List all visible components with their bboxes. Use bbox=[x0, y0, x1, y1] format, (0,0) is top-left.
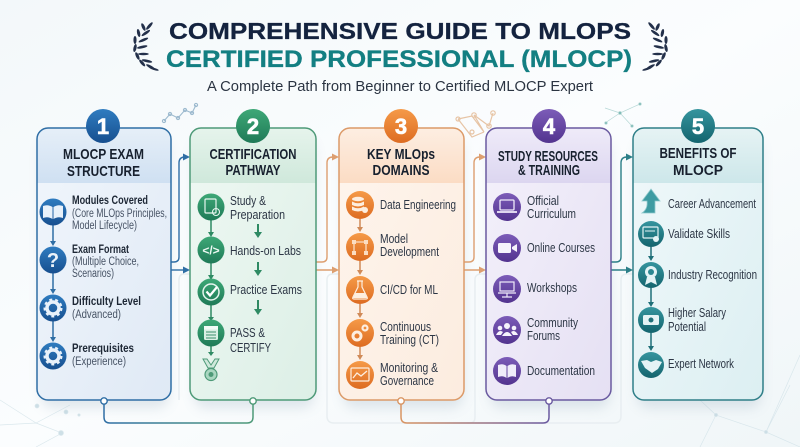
item: prerequisites: Prerequisites bbox=[72, 341, 134, 355]
icon: teal network decoration bbox=[605, 103, 641, 127]
item: modules covered bbox=[40, 193, 167, 232]
item: practice exams bbox=[198, 278, 302, 306]
badge 3: 3 bbox=[395, 114, 407, 139]
item: hands-on labs bbox=[198, 236, 301, 264]
panel: benefits of MLOCP bbox=[633, 109, 763, 400]
item: workshops bbox=[493, 275, 577, 303]
heading: BENEFITS OF bbox=[660, 145, 736, 162]
item: community forums: Community bbox=[527, 316, 579, 330]
heading: STUDY RESOURCES bbox=[498, 148, 598, 165]
heading bbox=[498, 148, 598, 179]
item: online courses bbox=[493, 234, 595, 262]
connector: panel 4 to panel 5 bbox=[611, 154, 633, 274]
item: monitoring and governance: Monitoring & bbox=[380, 361, 439, 375]
connector: bottom link panels 1-2 bbox=[101, 398, 256, 423]
item: documentation bbox=[493, 357, 595, 385]
subtitle: A Complete Path from Beginner to Certified MLOCP Expert bbox=[207, 78, 594, 95]
item: difficulty level bbox=[40, 294, 141, 322]
item: pass and certify: CERTIFY bbox=[230, 341, 272, 355]
item: industry recognition: Industry Recognition bbox=[668, 268, 757, 282]
panel shadows bbox=[41, 140, 761, 408]
badge 1 bbox=[86, 109, 120, 143]
item: continuous training: Continuous bbox=[380, 320, 431, 334]
item: modules covered: Model Lifecycle) bbox=[72, 220, 137, 232]
item: exam format: Exam Format bbox=[72, 242, 129, 256]
panel: key MLOps domains bbox=[339, 109, 464, 400]
item: community forums: Forums bbox=[527, 329, 560, 343]
item: online courses: Online Courses bbox=[527, 241, 595, 255]
heading bbox=[660, 145, 736, 179]
title bbox=[166, 18, 632, 73]
heading bbox=[367, 146, 435, 179]
heading: MLOCP bbox=[673, 162, 723, 179]
item: model development: Development bbox=[380, 245, 439, 259]
item: official curriculum: Curriculum bbox=[527, 207, 576, 221]
item: data engineering bbox=[346, 191, 456, 219]
item: exam format bbox=[40, 242, 139, 280]
item: expert network bbox=[638, 352, 735, 378]
item: higher salary potential: Higher Salary bbox=[668, 306, 727, 320]
heading: MLOCP EXAM bbox=[63, 146, 144, 163]
item: prerequisites: (Experience) bbox=[72, 356, 126, 368]
item: career advancement bbox=[642, 189, 756, 213]
title: COMPREHENSIVE GUIDE TO MLOPS bbox=[169, 18, 631, 44]
item: community forums bbox=[493, 316, 579, 344]
item: continuous training: Training (CT) bbox=[380, 333, 439, 347]
item: modules covered: Modules Covered bbox=[72, 193, 148, 207]
badge 3 bbox=[384, 109, 418, 143]
badge 5 bbox=[681, 109, 715, 143]
step connectors bbox=[208, 220, 214, 356]
item: career advancement: Career Advancement bbox=[668, 197, 756, 211]
item: difficulty level: (Advanced) bbox=[72, 309, 121, 321]
item: model development: Model bbox=[380, 232, 408, 246]
item: exam format: (Multiple Choice, bbox=[72, 256, 139, 268]
heading: KEY MLOps bbox=[367, 146, 435, 163]
item: prerequisites bbox=[40, 341, 134, 370]
badge 2: 2 bbox=[247, 114, 259, 139]
connector: panel 2 to panel 3 bbox=[316, 154, 339, 274]
heading: PATHWAY bbox=[226, 162, 280, 179]
icon: orange network decoration bbox=[456, 111, 495, 137]
item: study and preparation: Study & bbox=[230, 194, 267, 208]
item: documentation: Documentation bbox=[527, 364, 595, 378]
item: exam format: ? bbox=[47, 250, 59, 272]
item: monitoring and governance: Governance bbox=[380, 374, 434, 388]
badge 1: 1 bbox=[97, 114, 109, 139]
item: official curriculum: Official bbox=[527, 194, 559, 208]
heading: & TRAINING bbox=[518, 162, 580, 179]
item: validate skills bbox=[638, 221, 730, 247]
badge 5: 5 bbox=[692, 114, 704, 139]
icon: medal bbox=[203, 359, 219, 380]
badge 2 bbox=[236, 109, 270, 143]
item: modules covered: (Core MLOps Principles, bbox=[72, 208, 167, 220]
item: hands-on labs: </> bbox=[202, 244, 220, 258]
badge 4 bbox=[532, 109, 566, 143]
icon: left laurel bbox=[133, 22, 159, 71]
connector: panel 3 to panel 4 bbox=[464, 154, 486, 274]
item: pass and certify bbox=[198, 320, 272, 355]
item: CI/CD for ML bbox=[346, 276, 438, 304]
panel: study resources and training bbox=[486, 109, 611, 400]
item: higher salary potential bbox=[638, 306, 727, 334]
item: CI/CD for ML: CI/CD for ML bbox=[380, 283, 438, 297]
icon: right laurel bbox=[642, 22, 668, 71]
item: exam format: Scenarios) bbox=[72, 268, 114, 280]
faint frame lines behind panels bbox=[179, 274, 633, 423]
title: CERTIFIED PROFESSIONAL (MLOCP) bbox=[166, 46, 632, 73]
item: industry recognition bbox=[638, 262, 757, 288]
item: difficulty level: Difficulty Level bbox=[72, 294, 141, 308]
step connectors bbox=[50, 225, 56, 342]
panel: certification pathway bbox=[190, 109, 316, 400]
item: validate skills: Validate Skills bbox=[668, 227, 730, 241]
item: hands-on labs: Hands-on Labs bbox=[230, 244, 301, 258]
arrows: down bbox=[254, 224, 262, 315]
item: expert network: Expert Network bbox=[668, 357, 735, 371]
item: official curriculum bbox=[493, 193, 576, 221]
item: monitoring and governance bbox=[346, 361, 439, 389]
item: study and preparation bbox=[198, 194, 285, 222]
item: continuous training bbox=[346, 319, 439, 347]
decorative network patterns bbox=[0, 355, 800, 447]
heading: STRUCTURE bbox=[67, 163, 140, 180]
item: workshops: Workshops bbox=[527, 281, 577, 295]
connector: bottom link panels 3-4 bbox=[398, 398, 552, 423]
heading: DOMAINS bbox=[372, 162, 430, 179]
item: data engineering: Data Engineering bbox=[380, 198, 456, 212]
heading bbox=[63, 146, 144, 180]
step connectors bbox=[357, 219, 363, 360]
heading: CERTIFICATION bbox=[210, 146, 296, 163]
item: higher salary potential: Potential bbox=[668, 320, 706, 334]
step connectors bbox=[648, 247, 654, 351]
icon: line chart decoration bbox=[162, 103, 198, 123]
item: model development bbox=[346, 232, 439, 261]
badge 4: 4 bbox=[543, 114, 556, 139]
heading bbox=[210, 146, 296, 179]
connector: panel 1 to panel 2 bbox=[171, 154, 190, 274]
item: practice exams: Practice Exams bbox=[230, 283, 302, 297]
item: pass and certify: PASS & bbox=[230, 326, 266, 340]
item: study and preparation: Preparation bbox=[230, 208, 285, 222]
panel: MLOCP exam structure bbox=[37, 109, 171, 400]
